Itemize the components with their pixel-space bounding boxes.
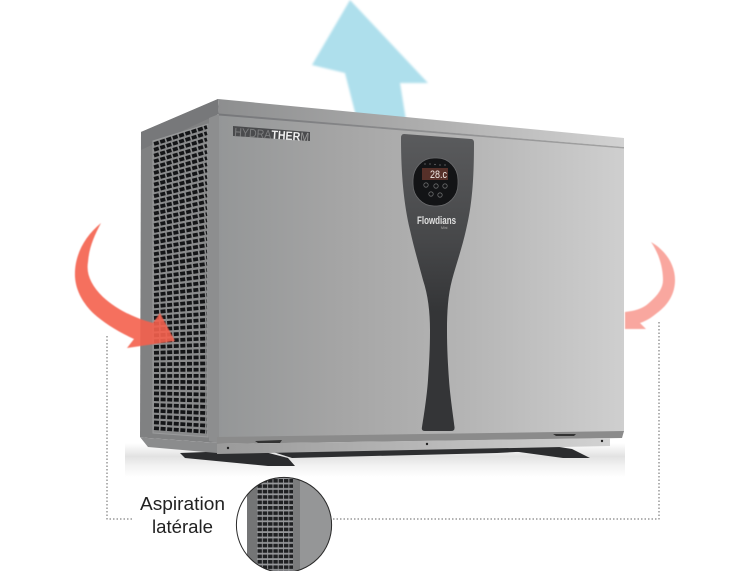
console body (401, 134, 474, 431)
plinth side (140, 437, 217, 453)
band shadow line (219, 114, 624, 148)
front panel (217, 114, 624, 438)
side top band (141, 99, 219, 150)
display oval (413, 158, 458, 206)
bottom vents (255, 440, 282, 443)
magnifier circle: side grille detail (236, 477, 333, 571)
plinth front (217, 438, 610, 454)
arrow: pink air intake right (625, 242, 675, 329)
brand subtitle: Mini (441, 226, 448, 230)
heat pump unit (140, 99, 624, 466)
feet and base bar (180, 445, 590, 466)
screws (227, 440, 603, 449)
touch buttons (424, 183, 447, 197)
temperature readout (422, 168, 448, 181)
temperature readout: 28.c (430, 169, 447, 181)
brand name: Flowdians (417, 215, 456, 227)
label: Aspiration latérale: latérale (152, 517, 213, 537)
dotted leader line: left (107, 336, 134, 519)
label: Aspiration latérale: Aspiration (140, 494, 225, 514)
status LEDs (424, 163, 446, 166)
bottom band (217, 431, 624, 444)
corner post (209, 114, 219, 443)
ground shadow (125, 443, 625, 477)
dotted leader line: right (333, 322, 659, 519)
logo: Hydratherm: HYDRATHERM (234, 125, 310, 144)
arrow: blue hot air exhaust going up (312, 0, 428, 120)
top front band (218, 99, 624, 147)
arrow: red air intake left (75, 223, 175, 348)
side grille (153, 124, 208, 437)
control console (401, 134, 474, 431)
label: Aspiration latérale (140, 494, 225, 537)
side panel (140, 99, 218, 443)
